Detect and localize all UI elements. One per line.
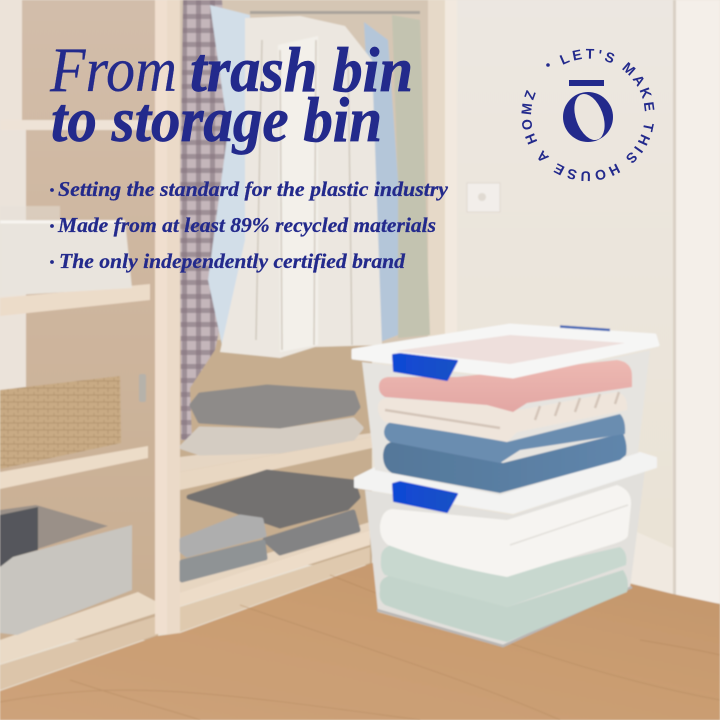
upper storage bin with clothes xyxy=(353,325,658,495)
lower storage bin with towels xyxy=(355,453,656,647)
bin lid xyxy=(355,453,656,513)
hanging clothes xyxy=(180,0,430,440)
folded clothes on shelves xyxy=(182,387,361,580)
white basket on upper shelf xyxy=(0,206,132,296)
left shelving unit xyxy=(0,0,167,690)
wall socket xyxy=(467,183,500,212)
headline: From xyxy=(49,35,177,105)
bin lid xyxy=(353,325,658,377)
blue shirt xyxy=(208,5,250,345)
denim xyxy=(384,414,625,463)
logo macron bar xyxy=(569,80,604,86)
circular slogan: LET'S MAKE THIS HOUSE A HOMZ xyxy=(521,48,654,182)
pink sweater xyxy=(379,360,632,412)
logo badge xyxy=(521,48,654,182)
blue handle xyxy=(393,482,457,512)
striped sweater xyxy=(378,392,627,442)
logo ring xyxy=(563,90,613,144)
floor xyxy=(0,563,720,720)
blue garment xyxy=(364,22,398,342)
blue handle xyxy=(393,354,457,380)
wicker basket xyxy=(0,376,121,469)
baseboard xyxy=(628,528,673,594)
bullet 3: The only independently certified brand xyxy=(59,249,405,273)
bullet 1: Setting the standard for the plastic industry xyxy=(58,177,449,201)
green towel xyxy=(380,570,628,642)
right door panel xyxy=(673,0,720,603)
metal hinge xyxy=(139,374,146,402)
headline xyxy=(49,35,413,155)
sage garment xyxy=(392,15,430,338)
separator dot xyxy=(546,63,550,67)
grey fabric basket xyxy=(0,505,132,635)
white shirts xyxy=(220,16,382,358)
right shelving unit xyxy=(167,0,457,634)
green towel xyxy=(381,545,626,607)
bullet 2: Made from at least 89% recycled materials xyxy=(57,213,436,237)
white towel xyxy=(380,485,631,577)
plaid shirt xyxy=(180,0,232,440)
headline: to storage bin xyxy=(51,85,382,155)
denim xyxy=(383,433,627,493)
bullet list xyxy=(50,177,449,273)
headline: trash bin xyxy=(190,35,413,105)
